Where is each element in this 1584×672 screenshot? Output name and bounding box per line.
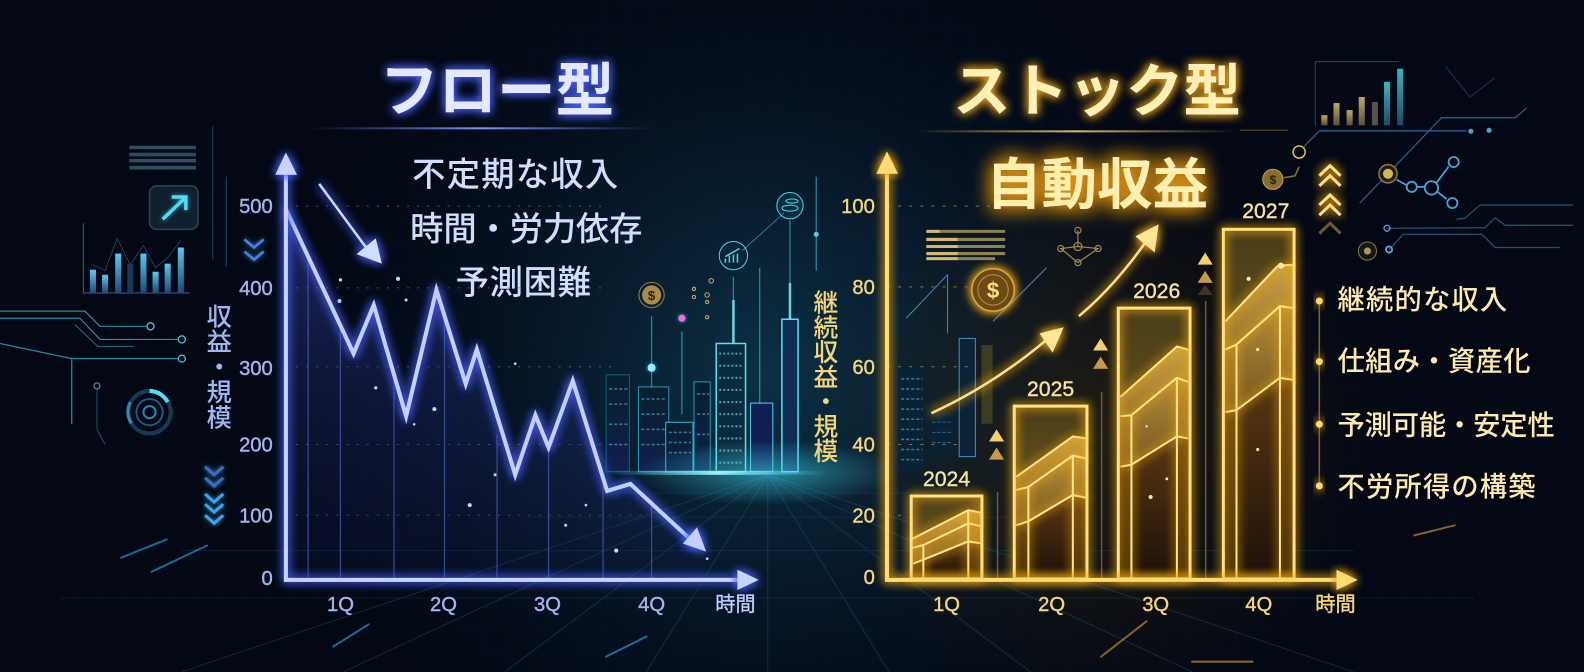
benefit text: 予測可能・安定性 (1338, 409, 1555, 440)
stock y labels: 0 (864, 567, 875, 589)
icon: small coin: $ (1269, 173, 1276, 187)
stock y labels (841, 196, 875, 589)
city skyline (606, 177, 909, 506)
benefit text: 継続的な収入 (1338, 284, 1507, 315)
flow y labels: 300 (239, 358, 273, 380)
stock x labels: 2Q (1038, 594, 1065, 616)
trend arrow (319, 184, 382, 264)
benefit text: 不労所得の構築 (1338, 471, 1536, 502)
stock y labels: 20 (852, 505, 875, 527)
flow drop lines (308, 258, 652, 579)
benefit list (1316, 284, 1555, 502)
icon: big gold coin: $ (987, 278, 1000, 303)
faded chevron (1319, 223, 1341, 233)
streak decoration bottom (121, 525, 1455, 662)
stock x labels: 時間 (1315, 593, 1356, 616)
flow declining line (286, 209, 697, 546)
bar 2024 (910, 496, 982, 579)
bullet dots (1316, 298, 1323, 489)
right chevrons (1319, 166, 1341, 215)
title: stock: ストック型 (953, 60, 1241, 124)
flow traits (410, 157, 642, 302)
perspective floor grid (61, 475, 1475, 672)
flow traits: 不定期な収入 (412, 157, 618, 194)
flow sparkles (337, 277, 708, 560)
benefit text: 仕組み・資産化 (1338, 346, 1530, 377)
stock axes (887, 174, 1339, 580)
flow x labels: 3Q (534, 594, 561, 616)
left thin verticals (213, 126, 226, 267)
stock y arrowhead (876, 152, 898, 174)
title: automatic income: 自動収益 (986, 154, 1208, 216)
icon: hub node (1379, 165, 1397, 183)
flow y labels: 500 (239, 196, 273, 218)
flow x labels: 1Q (327, 594, 354, 616)
icon: big gold coin (972, 269, 1014, 311)
icon: ring gauge (128, 391, 171, 433)
flow grid lines (286, 206, 647, 515)
flow line arrowhead (683, 527, 706, 552)
stock x labels (933, 593, 1356, 616)
stock year labels: 2027 (1242, 200, 1289, 223)
stock y title: 継続収益・規模 (810, 290, 838, 463)
chart: stock income (810, 152, 1358, 616)
flow y title: 収益・規模 (203, 303, 232, 429)
top right bar chart (1315, 62, 1403, 126)
flow x labels: 時間 (715, 593, 756, 616)
circuit lines left (0, 311, 185, 444)
x axis arrowhead (737, 570, 759, 590)
icon: small coin lower (1358, 242, 1377, 260)
pink dot (678, 315, 685, 322)
icon: arrow box (150, 186, 198, 229)
flow area under line (286, 209, 704, 579)
icon: coin (639, 282, 664, 308)
left side decoration: table bars (129, 147, 196, 168)
growth arrow 1 (931, 327, 1064, 413)
bar 2026 (1118, 308, 1190, 579)
stock x labels: 4Q (1245, 594, 1272, 616)
flow y labels: 400 (239, 278, 273, 300)
icon: small coin (1263, 167, 1299, 189)
stock y labels: 80 (852, 277, 875, 299)
bar sparkles (1145, 263, 1284, 499)
flow y labels: 0 (262, 568, 273, 590)
mini bar chart (83, 223, 190, 293)
flow y labels: 100 (239, 505, 273, 527)
icon: coin: $ (648, 288, 656, 303)
right circuits (1240, 67, 1573, 253)
flow axes (286, 174, 742, 580)
gold connector lines (998, 301, 1206, 579)
title: flow: フロー型 (380, 59, 614, 124)
flow y labels (239, 196, 273, 590)
flow x labels (327, 593, 756, 616)
stock year labels: 2026 (1133, 280, 1180, 303)
icon: circle symbols over the city (692, 193, 803, 319)
stock x labels: 1Q (933, 594, 960, 616)
title underline left (308, 127, 657, 129)
stock year labels: 2024 (923, 468, 970, 491)
chart: flow income (203, 153, 759, 616)
growth triangles (989, 253, 1213, 460)
title underline right (914, 130, 1238, 132)
y axis arrowhead (275, 153, 297, 175)
left chevrons (244, 239, 264, 260)
flow y labels: 200 (239, 435, 273, 457)
decoration behind stock chart (898, 227, 1101, 470)
stock x arrowhead (1336, 570, 1358, 590)
stock year labels: 2025 (1027, 378, 1074, 401)
stock x labels: 3Q (1142, 594, 1169, 616)
stock y labels: 60 (852, 357, 875, 379)
stock y labels: 40 (852, 435, 875, 457)
flow traits: 予測困難 (456, 265, 591, 302)
benefit text (1338, 284, 1555, 502)
stock y labels: 100 (841, 196, 875, 218)
bar 2025 (1014, 406, 1087, 579)
flow x labels: 4Q (638, 594, 665, 616)
stock grid lines (887, 206, 990, 515)
growth arrow 2 (1079, 224, 1159, 316)
stock year labels (923, 200, 1289, 491)
bar 2027 (1223, 229, 1294, 579)
flow traits: 時間・労力依存 (410, 211, 642, 248)
lower left chevrons (205, 467, 223, 523)
flow x labels: 2Q (430, 594, 457, 616)
